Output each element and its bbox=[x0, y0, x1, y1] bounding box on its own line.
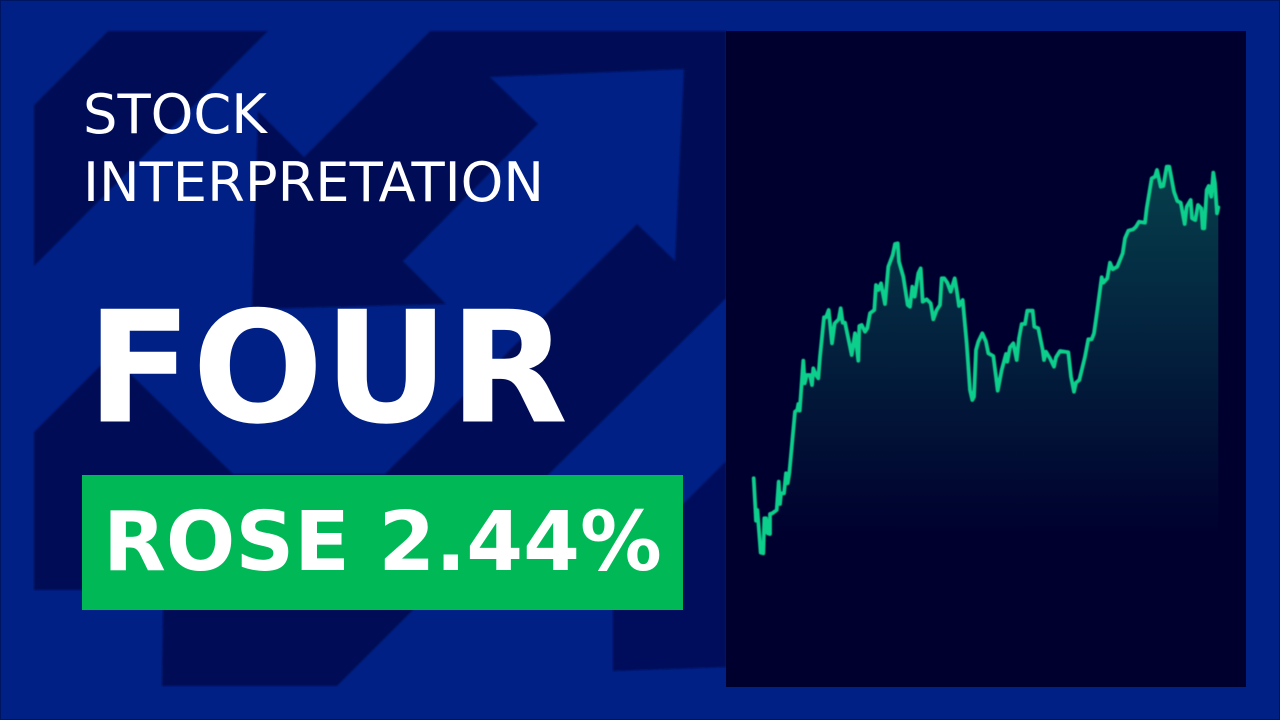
badge: rose 2.44%: ROSE 2.44% bbox=[103, 495, 662, 590]
ticker: FOUR: FOUR bbox=[86, 278, 568, 458]
title: stock interpretation bbox=[83, 83, 544, 214]
panel: stock chart bbox=[726, 31, 1246, 687]
chart line bbox=[754, 167, 1218, 553]
badge: rose 2.44% bbox=[82, 475, 683, 610]
chart area fill bbox=[754, 167, 1218, 535]
background arrows bbox=[34, 31, 726, 686]
title: stock interpretation: INTERPRETATION bbox=[83, 151, 544, 214]
title: stock interpretation: STOCK bbox=[83, 83, 268, 146]
